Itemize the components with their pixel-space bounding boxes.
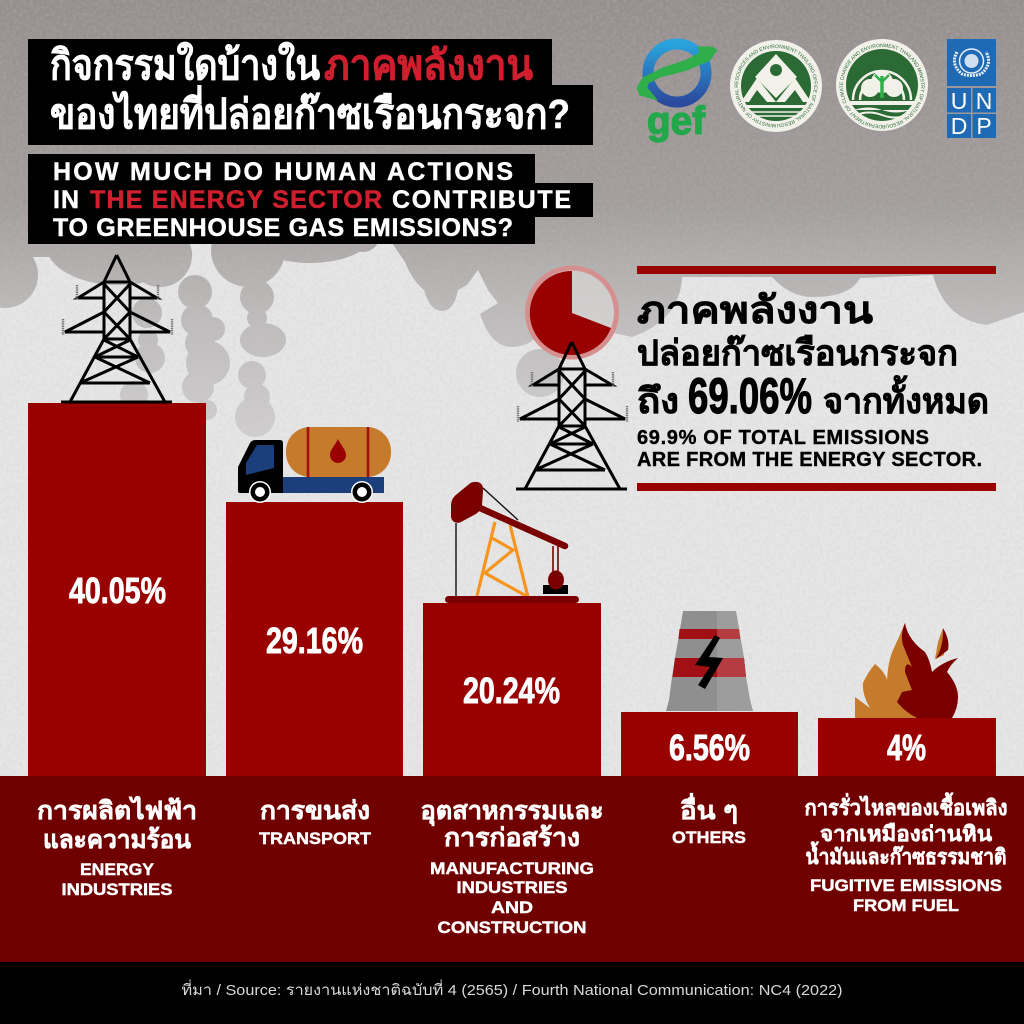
callout rule bottom [637,483,996,491]
logo: GEF [637,44,717,143]
logo: climate change department seal [836,39,928,131]
bar: others 6.56% [621,712,798,776]
source line: ที่มา / Source: รายงานแห่งชาติฉบับที่ 4 (2565) / Fourth National Communication: NC4 (2022) [182,979,843,999]
logo: UNDP: U [951,88,967,114]
title: Thai heading: ของไทยที่ปล่อยก๊าซเรือนกระจก? [50,85,570,137]
callout English text: ARE FROM THE ENERGY SECTOR. [637,449,982,471]
callout Thai text: 69.06% [688,368,812,424]
bar: manufacturing 20.24% [423,603,601,776]
logo: UNDP: P [976,113,992,139]
label: others: OTHERS [672,828,746,847]
title: English heading: THE ENERGY SECTOR [90,186,382,214]
bar: fugitive emissions 4% [818,718,996,776]
label: transport: TRANSPORT [259,829,372,848]
label: others [672,793,746,847]
label: manufacturing: การก่อสร้าง [444,824,580,852]
pie chart: 69.06% [528,268,616,357]
logo: UNDP: N [976,88,992,114]
bar: transport 29.16% [226,502,403,776]
label: energy industries: และความร้อน [43,826,191,854]
icon: transmission tower [61,255,172,402]
footer bar [0,962,1024,1024]
logo: ministry seal [730,40,822,132]
label: manufacturing: AND [491,898,533,917]
label: fugitive emissions: น้ำมันและก๊าซธรรมชาติ [806,841,1006,869]
callout Thai text: ปล่อยก๊าซเรือนกระจก [637,334,958,373]
label: fugitive emissions: การรั่วไหลของเชื้อเพลิง [804,792,1008,820]
icon: tanker truck [238,427,391,503]
callout English text [637,427,982,471]
icon: oil pump jack [445,482,579,603]
bar: energy industries 40.05% [28,403,206,776]
label: others: อื่น ๆ [680,793,738,825]
title: English heading: HOW MUCH DO HUMAN ACTIONS [53,158,513,186]
label: fugitive emissions: จากเหมืองถ่านหิน [820,822,993,846]
label band [0,776,1024,962]
logo: UNDP [947,39,996,139]
background: smoky sky and paper [0,0,1024,776]
callout: energy sector share [516,266,996,491]
title: English heading: IN [53,186,79,214]
bar: fugitive emissions 4%: 4% [887,727,926,768]
title: English heading [28,154,593,244]
icon: flame [855,623,958,718]
label: transport [259,797,372,848]
callout English text: 69.9% OF TOTAL EMISSIONS [637,427,929,449]
callout Thai text: ถึง [637,382,679,421]
label: energy industries: การผลิตไฟฟ้า [37,795,197,825]
bar: transport 29.16%: 29.16% [266,620,363,661]
label: fugitive emissions: FUGITIVE EMISSIONS [810,876,1002,895]
label: manufacturing: อุตสาหกรรมและ [420,797,604,827]
label: fugitive emissions [804,792,1008,915]
callout rule top [637,266,996,274]
label: transport: การขนส่ง [260,797,370,825]
callout Thai text: จากทั้งหมด [823,375,989,421]
label: energy industries: INDUSTRIES [62,880,172,899]
logo: GEF: gef [647,100,706,143]
bar: energy industries 40.05%: 40.05% [69,570,166,611]
icon: cooling tower with bolt [666,611,753,711]
label: manufacturing: CONSTRUCTION [438,918,586,937]
callout Thai text: ภาคพลังงาน [637,290,873,332]
title: English heading: CONTRIBUTE [392,186,571,214]
label: manufacturing: MANUFACTURING [430,859,594,878]
label: energy industries [37,795,197,899]
title: English heading: TO GREENHOUSE GAS EMISSIONS? [53,214,513,242]
label: fugitive emissions: FROM FUEL [853,896,959,915]
label: manufacturing [420,797,604,937]
logo: UNDP: D [951,113,967,139]
title: Thai heading: ภาคพลังงาน [324,42,533,88]
title: Thai heading: กิจกรรมใดบ้างใน [50,41,320,88]
label: manufacturing: INDUSTRIES [456,878,568,897]
icon: transmission tower small [516,342,627,489]
label: energy industries: ENERGY [80,860,155,879]
bar: others 6.56%: 6.56% [669,727,750,768]
title: Thai heading [28,39,593,145]
callout Thai text [637,290,989,424]
bar: manufacturing 20.24%: 20.24% [463,670,560,711]
